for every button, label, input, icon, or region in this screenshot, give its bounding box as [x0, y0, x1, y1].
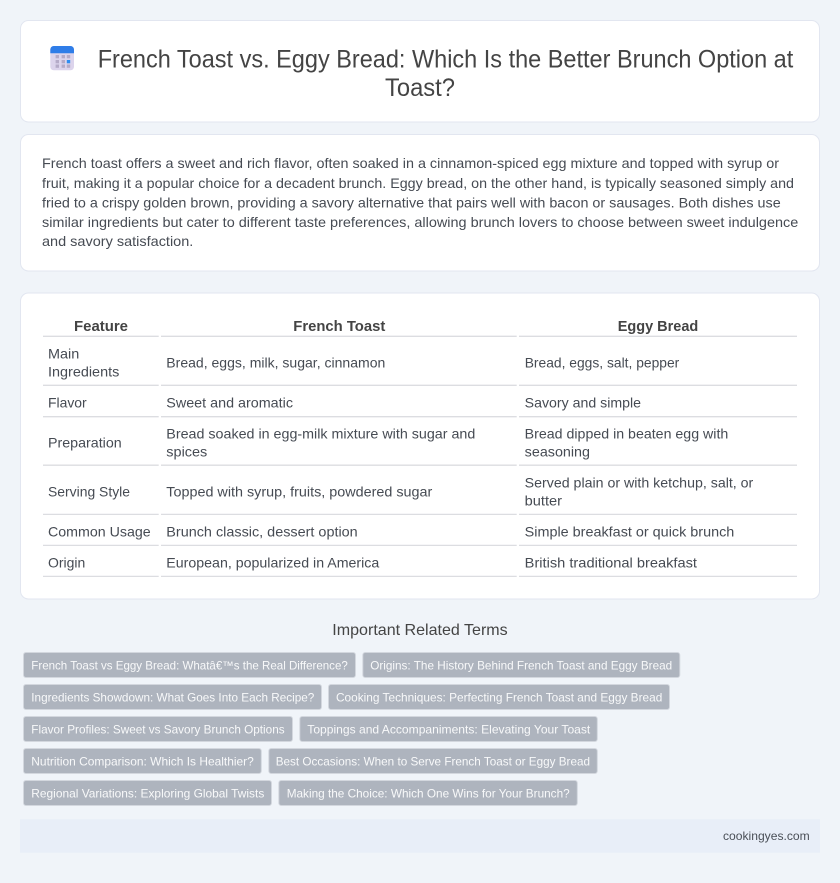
- row: preparation: spices: [166, 443, 207, 459]
- row: flavor: Flavor: [48, 394, 87, 410]
- tag: Ingredients Showdown: What Goes Into Each Recipe?: [31, 690, 315, 704]
- tag: Origins: The History Behind French Toast and Eggy Bread: [370, 658, 672, 672]
- tag: [24, 652, 356, 678]
- row: origin: Origin: [48, 554, 85, 570]
- row: flavor: [48, 394, 641, 410]
- panel: title card: [20, 20, 820, 122]
- tag: [24, 748, 261, 774]
- intro paragraph: fruit, making it a popular choice for a decadent brunch. Eggy bread, on the other hand, is typically seasoned simply and: [42, 175, 794, 191]
- panel: comparison table: [20, 293, 820, 599]
- tag: [24, 780, 272, 806]
- table rules: [43, 336, 797, 576]
- row: common usage: Brunch classic, dessert option: [166, 523, 358, 539]
- tag: [328, 684, 670, 710]
- row: serving style: Serving Style: [48, 483, 130, 499]
- row: main ingredients: Bread, eggs, salt, pepper: [525, 354, 680, 370]
- row: origin: British traditional breakfast: [525, 554, 697, 570]
- table header: French Toast: [293, 318, 385, 335]
- row: preparation: [48, 425, 728, 459]
- tag: [24, 716, 292, 742]
- tag: Nutrition Comparison: Which Is Healthier?: [31, 754, 254, 768]
- tag: Regional Variations: Exploring Global Twists: [31, 786, 264, 800]
- tag: Toppings and Accompaniments: Elevating Your Toast: [307, 722, 591, 736]
- row: common usage: Common Usage: [48, 523, 151, 539]
- tag: [363, 652, 680, 678]
- heading: important related terms: Important Related Terms: [332, 622, 508, 639]
- intro paragraph: similar ingredients but cater to different taste preferences, allowing brunch lovers to choose between sweet indulgence: [42, 214, 799, 230]
- tag: Flavor Profiles: Sweet vs Savory Brunch Options: [31, 722, 285, 736]
- intro paragraph: French toast offers a sweet and rich flavor, often soaked in a cinnamon-spiced egg mixture and topped with syrup or: [42, 155, 779, 171]
- intro paragraph: [42, 155, 799, 249]
- row: origin: [48, 554, 697, 570]
- tag: Best Occasions: When to Serve French Toast or Eggy Bread: [276, 754, 590, 768]
- related term tags: [24, 652, 680, 806]
- tag: [269, 748, 597, 774]
- row: main ingredients: Ingredients: [48, 363, 119, 379]
- row: common usage: [48, 523, 734, 539]
- tag: Making the Choice: Which One Wins for Your Brunch?: [287, 786, 570, 800]
- row: preparation: seasoning: [525, 443, 590, 459]
- table header: [74, 318, 698, 335]
- row: flavor: Savory and simple: [525, 394, 641, 410]
- icon: calendar: [50, 46, 74, 70]
- row: main ingredients: Bread, eggs, milk, sugar, cinnamon: [166, 354, 385, 370]
- footer: cookingyes.com: [723, 829, 810, 843]
- intro paragraph: fried to a crispy golden brown, providing a savory alternative that pairs well with bacon or sausages. Both dishes use: [42, 194, 781, 210]
- row: main ingredients: Main: [48, 345, 79, 361]
- row: serving style: Served plain or with ketchup, salt, or: [525, 474, 754, 490]
- tag: [300, 716, 597, 742]
- table header: Eggy Bread: [618, 318, 698, 335]
- table header: Feature: [74, 318, 128, 335]
- panel: intro text: [20, 134, 820, 271]
- title: [98, 46, 793, 102]
- title: French Toast vs. Eggy Bread: Which Is the Better Brunch Option at: [98, 46, 793, 73]
- tag: [24, 684, 322, 710]
- tag: [279, 780, 577, 806]
- row: preparation: Bread soaked in egg-milk mixture with sugar and: [166, 425, 475, 441]
- row: origin: European, popularized in America: [166, 554, 380, 570]
- row: main ingredients: [48, 345, 680, 379]
- row: flavor: Sweet and aromatic: [166, 394, 293, 410]
- intro paragraph: and savory satisfaction.: [42, 233, 193, 249]
- row: common usage: Simple breakfast or quick brunch: [525, 523, 734, 539]
- tag: French Toast vs Eggy Bread: Whatâ€™s the Real Difference?: [31, 658, 348, 672]
- tag: Cooking Techniques: Perfecting French Toast and Eggy Bread: [336, 690, 662, 704]
- title: Toast?: [385, 75, 455, 102]
- row: serving style: butter: [525, 492, 562, 508]
- row: preparation: Preparation: [48, 434, 122, 450]
- row: preparation: Bread dipped in beaten egg with: [525, 425, 728, 441]
- row: serving style: [48, 474, 754, 508]
- footer: [20, 819, 820, 853]
- row: serving style: Topped with syrup, fruits, powdered sugar: [166, 483, 433, 499]
